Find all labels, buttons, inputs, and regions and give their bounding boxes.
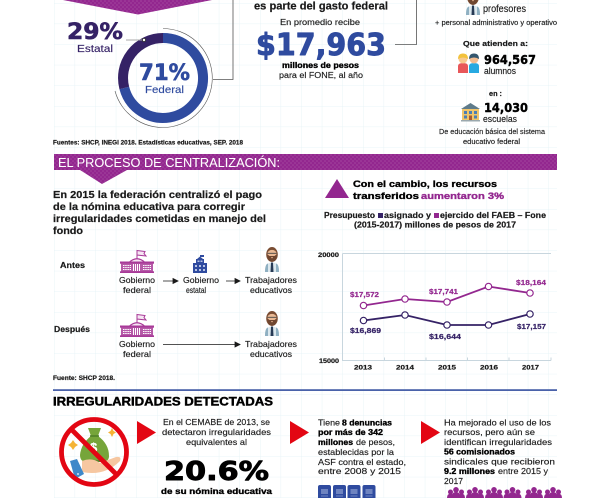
panel: profesores, alumnos, escuelas: alumnos [484,66,516,76]
arrow [290,421,309,444]
panel: FONE amount [254,0,388,80]
icon: gobierno estatal [193,255,207,273]
diagram: antes: estatal [186,285,206,295]
icon: prohibido dinero: $ [90,440,98,455]
series: ejercido [350,278,547,309]
label: 29% estatal [67,20,146,55]
label: 71% federal: 71% [139,61,190,86]
line chart: 2014 [396,364,414,372]
text block: centralización: irregularidades cometidas en manejo del [53,214,266,225]
panel: denuncias: ASF contra el estado, [318,457,406,467]
diagram: después: Trabajadores [245,339,297,349]
icon: profesor [466,0,480,15]
panel: CEMABE: de su nómina educativa [161,486,272,496]
diagram: antes: federal [123,285,151,295]
text block: centralización: En 2015 la federación centralizó el pago [53,190,262,201]
panel: denuncias: 8 denuncias [342,418,392,428]
panel: profesores, alumnos, escuelas: Que atienden a: [463,39,528,48]
line chart [318,252,551,372]
panel: CEMABE: detectaron irregularidades [162,427,271,437]
series: asignado: $16,869 [350,326,381,335]
label: 71% federal: Federal [145,84,184,96]
diagram: después: Después [54,325,91,334]
diagram: antes: Gobierno [183,275,219,285]
panel: profesores, alumnos, escuelas: 14,030 [484,100,528,115]
panel: profesores, alumnos, escuelas: escuelas [483,114,517,124]
line chart: 20000 [318,252,339,259]
panel: denuncias: establecidas por la [318,447,394,457]
panel: CEMABE: En el CEMABE de 2013, se [163,417,270,427]
panel: denuncias: entre 2008 y 2015 [318,466,401,476]
heading: irregularidades detectadas: IRREGULARIDADES DETECTADAS [53,394,273,408]
connector left [213,0,233,80]
connector right [395,0,416,44]
diagram: antes: Antes [60,261,86,270]
line chart: 15000 [319,358,339,365]
panel: comisionados: 56 comisionados [444,446,515,456]
panel: CEMABE: 20.6% [164,457,269,487]
panel: comisionados: 9.2 millones [444,466,495,476]
heading: proceso de centralización [54,154,557,184]
icon: gobierno federal [120,314,154,337]
chart title: ejercido del FAEB – Fone [440,211,547,220]
callout: aumentaron 3%: Con el cambio, los recursos [353,179,497,190]
label: 29% estatal: Estatal [77,43,113,55]
top banner arrow [63,0,212,14]
icons: comisionados [447,487,562,498]
panel: profesores, alumnos, escuelas: + personal administrativo y operativo [435,20,557,27]
series: asignado [350,311,546,341]
series: asignado: $17,157 [517,322,546,331]
text block: centralización: fondo [53,226,83,237]
line chart: 2015 [438,364,456,372]
heading: proceso de centralización: EL PROCESO DE CENTRALIZACIÓN: [58,155,280,170]
panel: comisionados: sindicales que recibieron [444,456,555,466]
panel: profesores, alumnos, escuelas: De educación básica del sistema [439,129,545,136]
line chart: 2016 [480,364,498,372]
arrow [163,278,178,284]
series: ejercido: $17,572 [350,290,379,299]
arrow [226,278,240,284]
panel: profesores, alumnos, escuelas: profesores [483,4,526,15]
diagram: antes: Trabajadores [245,275,297,285]
panel: comisionados: entre 2015 y [498,466,549,476]
chart title: asignado y [384,211,432,220]
arrow [163,342,240,347]
source note: Fuentes: SHCP, INEGI 2018. Estadísticas educativas, SEP. 2018 [53,140,243,146]
callout: aumentaron 3%: transferidos [353,191,419,202]
panel: profesores, alumnos, escuelas: en : [489,89,502,98]
diagram: después [54,311,297,359]
panel: comisionados: identifican irregularidades [444,437,552,447]
text block: centralización: de la nómina educativa para corregir [53,202,245,213]
chart title: (2015-2017) millones de pesos de 2017 [354,220,517,230]
panel: denuncias: millones [318,437,353,447]
diagram: antes: educativos [250,285,292,295]
panel: comisionados: recursos, pero aún se [444,427,535,437]
arrow [137,421,156,444]
icon: escuela [461,103,480,122]
donut chart [115,28,212,127]
diagram: después: federal [123,349,151,359]
line chart: 2017 [522,364,539,372]
panel: denuncias: de pesos, [356,437,395,447]
diagram: antes: Gobierno [119,275,155,285]
icon: prohibido dinero [62,420,126,484]
panel: FONE amount: $17,963 [256,28,386,63]
panel: CEMABE [137,417,272,496]
panel: profesores, alumnos, escuelas: 964,567 [484,52,536,67]
panel: FONE amount: es parte del gasto federal [254,0,388,12]
text block: centralización [53,190,266,237]
panel: CEMABE: equivalentes al [186,437,247,447]
callout: aumentaron 3% [325,179,505,202]
chart title [324,211,547,230]
panel: comisionados: Ha mejorado el uso de los [444,418,551,428]
panel: FONE amount: En promedio recibe [280,18,361,27]
icon: gobierno federal [120,250,154,273]
panel: federal vs estatal share [67,20,212,127]
arrow [421,421,440,444]
line chart: 2013 [354,364,372,372]
series: ejercido: $18,164 [516,278,547,287]
series: asignado: $16,644 [429,332,462,341]
icon: alumnos [458,54,479,73]
section divider [53,389,557,391]
diagram: después: Gobierno [119,339,155,349]
panel: denuncias: Tiene [318,418,340,428]
series: ejercido: $17,741 [429,287,458,296]
label: 29% estatal: 29% [67,20,123,45]
panel: profesores, alumnos, escuelas [435,0,557,146]
callout: aumentaron 3%: aumentaron 3% [421,191,505,202]
icons: documentos [318,485,376,498]
panel: comisionados: 2017 [444,476,463,486]
diagram: antes [60,247,297,295]
panel: profesores, alumnos, escuelas: educativo federal [463,139,520,146]
diagram: después: educativos [250,349,292,359]
label: 71% federal [139,61,190,96]
panel: denuncias [290,418,406,498]
icon: trabajador [265,311,279,336]
panel: comisionados [421,418,562,498]
chart title: Presupuesto [324,211,375,220]
icon: trabajador [265,247,279,272]
source note: Fuente: SHCP 2018. [53,375,115,382]
panel: FONE amount: para el FONE, al año [279,71,364,80]
panel: FONE amount: millones de pesos [282,61,360,70]
panel: denuncias: por más de 342 [318,427,383,437]
